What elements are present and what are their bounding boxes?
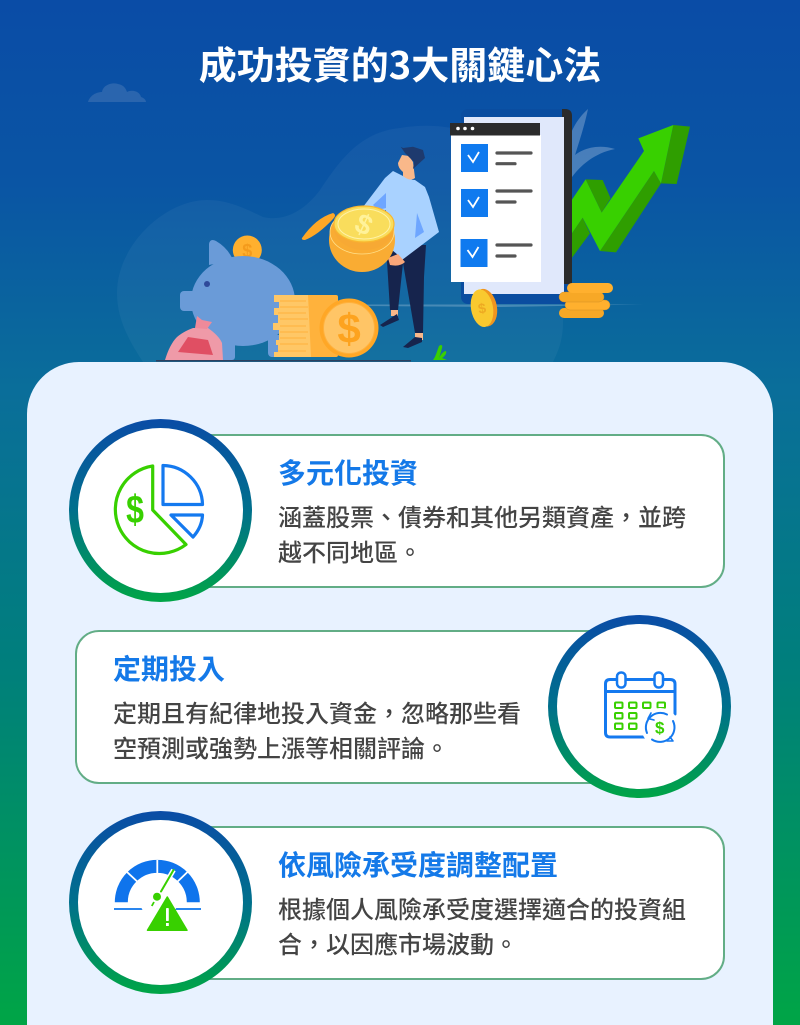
coins in hand: $ <box>350 207 378 242</box>
text block: 越不同地區。 <box>278 533 422 568</box>
standing coin: $ <box>477 300 487 317</box>
icon: calendar <box>548 615 731 798</box>
text block: 涵蓋股票、債券和其他另類資產，並跨 <box>278 498 686 533</box>
text block: 根據個人風險承受度選擇適合的投資組 <box>278 890 686 925</box>
background blob <box>117 126 563 362</box>
heading: 依風險承受度調整配置 <box>278 844 558 884</box>
heading: 定期投入 <box>113 648 225 688</box>
text block: 定期且有紀律地投入資金，忽略那些看 <box>113 694 521 729</box>
icon: pie chart <box>69 419 252 602</box>
panel: content background <box>27 362 773 1025</box>
tablet checklist <box>450 109 572 304</box>
flying coin <box>302 213 335 240</box>
title: 成功投資的3大關鍵心法 <box>199 35 601 90</box>
icon: calendar: $ <box>655 718 665 738</box>
card: regular investing <box>75 630 630 784</box>
text block: 合，以因應市場波動。 <box>278 925 518 960</box>
person <box>363 147 439 348</box>
money bag <box>165 316 223 360</box>
text block: 空預測或強勢上漲等相關評論。 <box>113 729 449 764</box>
text block <box>278 890 686 960</box>
ground line <box>156 360 411 362</box>
heading: 多元化投資 <box>278 452 418 492</box>
coin stack right <box>559 283 613 318</box>
icon: pie chart: $ <box>126 487 144 532</box>
card: risk tolerance <box>170 826 725 980</box>
hero illustration <box>88 84 690 362</box>
leaves <box>566 109 615 180</box>
text block <box>113 694 521 764</box>
big dollar coin: $ <box>337 305 361 352</box>
card: diversified investing <box>170 434 725 588</box>
stacked coins <box>273 295 338 357</box>
ground highlight <box>367 304 645 307</box>
plant <box>433 345 447 360</box>
icon: risk gauge <box>69 811 252 994</box>
piggy bank <box>180 240 295 360</box>
coin behind pig: $ <box>242 241 252 261</box>
big dollar coin <box>320 298 378 358</box>
coins in hand <box>329 206 395 272</box>
text block <box>278 498 686 568</box>
icon: rising arrow <box>567 125 690 264</box>
standing coin <box>468 287 500 329</box>
coin behind pig <box>233 236 262 264</box>
icon: cloud <box>88 83 146 102</box>
